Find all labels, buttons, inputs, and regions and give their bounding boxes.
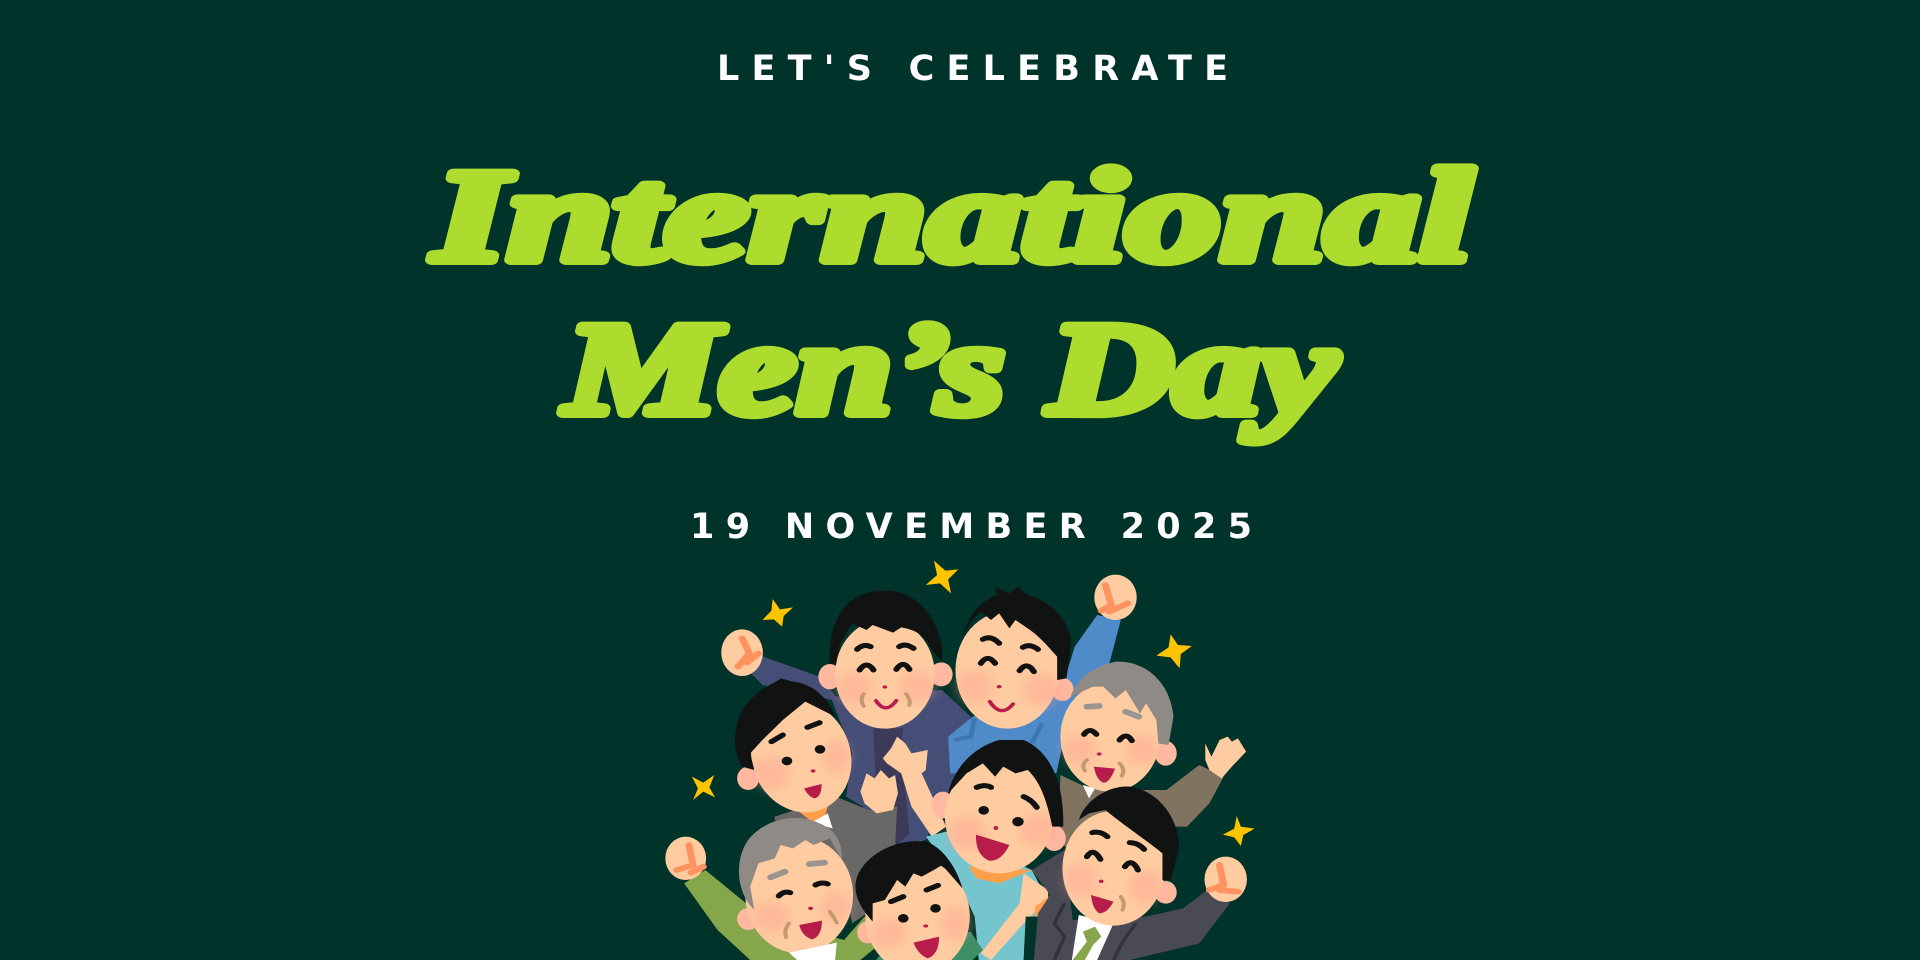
date: 19 NOVEMBER 2025	[690, 507, 1252, 547]
figure: man in teal shirt with raised hand	[883, 737, 1066, 960]
eyebrow text: LET'S CELEBRATE	[717, 49, 1228, 89]
icon: sparkle stars	[692, 561, 1255, 846]
illustration: cheering group of men	[665, 561, 1255, 960]
title: Men’s Day	[562, 295, 1338, 442]
figure: grey-haired man in brown jacket	[1058, 662, 1246, 853]
figure: man in navy suit	[721, 591, 971, 847]
figure: man in grey jacket	[735, 678, 926, 923]
title: International	[431, 142, 1472, 289]
figure: man in blue shirt	[948, 575, 1137, 773]
figure: man in dark suit with green tie	[1032, 787, 1247, 960]
figure: grey-haired man in green cardigan	[665, 818, 881, 960]
figure: young man in green shirt	[855, 841, 983, 960]
title	[431, 142, 1472, 442]
